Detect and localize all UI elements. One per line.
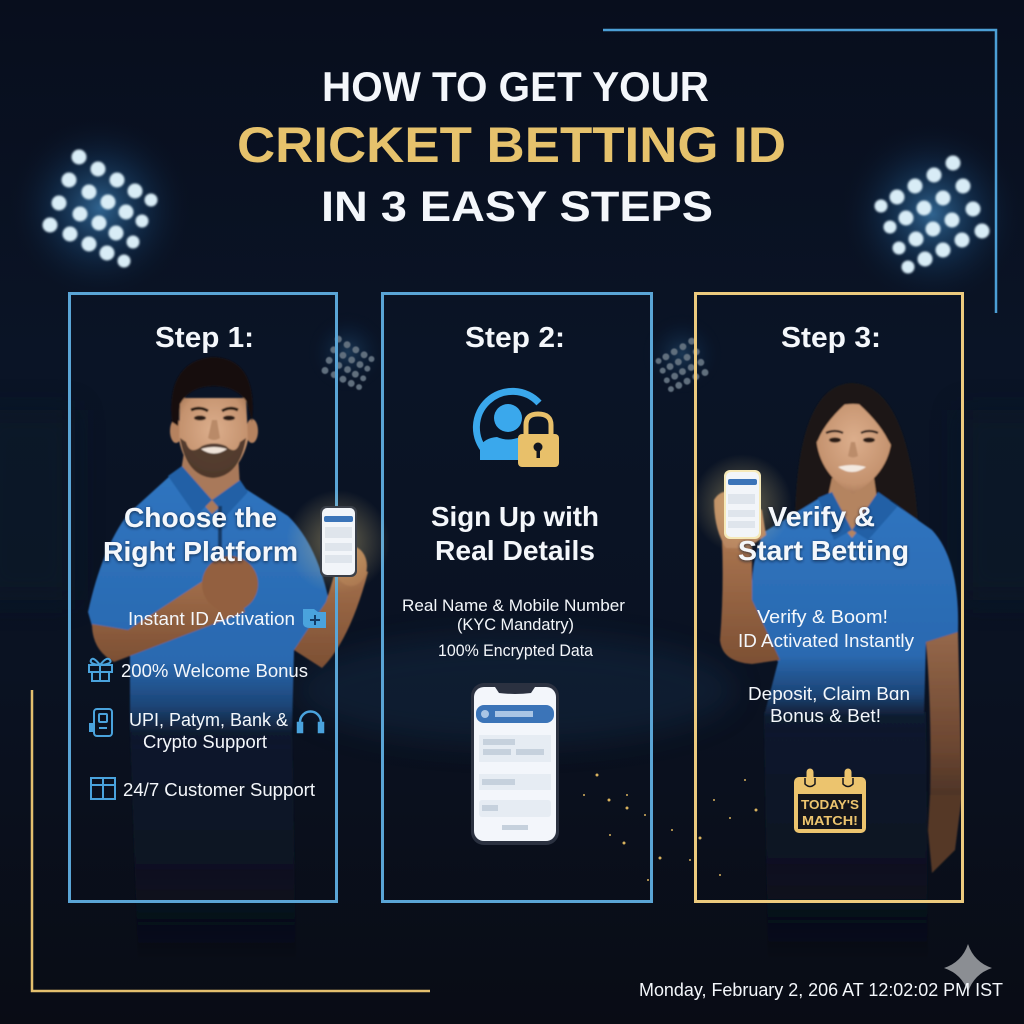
person: woman	[714, 383, 962, 960]
text: KYC details: 100% Encrypted Data	[438, 641, 593, 660]
icon: headphones	[298, 712, 323, 732]
eyes	[194, 416, 206, 420]
title line 2: CRICKET BETTING ID	[237, 117, 786, 173]
left forearm	[92, 562, 245, 662]
panel: step 2	[382, 294, 652, 902]
step 2 heading	[431, 501, 599, 566]
panel: step 3	[696, 294, 962, 902]
gold sparkles	[583, 774, 758, 881]
phone: woman's hand	[692, 454, 792, 554]
face	[179, 398, 248, 478]
neck	[826, 478, 878, 538]
eyes	[829, 437, 841, 443]
fist	[202, 556, 258, 612]
floodlight: small left	[308, 312, 388, 392]
smile	[838, 465, 866, 472]
corner frame: bottom left	[32, 690, 430, 991]
date stamp: Monday, February 2, 206 AT 12:02:02 PM IST	[639, 980, 1003, 1000]
step 2 heading: Sign Up with	[431, 501, 599, 532]
left hand	[714, 492, 766, 548]
shirt	[88, 474, 330, 732]
text: welcome bonus: 200% Welcome Bonus	[121, 661, 308, 681]
icon: folder plus	[303, 609, 326, 628]
step 1 label: Step 1:	[155, 322, 254, 354]
icon: user and padlock	[476, 391, 559, 467]
text: payment support: Crypto Support	[143, 732, 267, 752]
text: customer support: 24/7 Customer Support	[123, 780, 315, 800]
collar	[168, 466, 248, 516]
right arm	[926, 632, 962, 800]
right hand	[335, 546, 367, 586]
step 1 heading	[103, 502, 298, 567]
phone glow	[692, 454, 792, 554]
right forearm	[294, 556, 368, 668]
shirt	[752, 498, 958, 716]
text: verify: ID Activated Instantly	[738, 631, 914, 651]
panel: step 1	[70, 294, 336, 902]
nose	[208, 420, 220, 440]
phone glow	[286, 490, 390, 594]
icon: sparkle watermark	[944, 944, 992, 992]
text: KYC details: Real Name & Mobile Number	[402, 596, 625, 615]
phone mockup	[471, 683, 559, 845]
hair back	[795, 383, 918, 522]
floodlight: left	[8, 116, 192, 300]
step 1 heading: Choose the	[124, 502, 277, 533]
title line 1: HOW TO GET YOUR	[322, 63, 709, 110]
floodlight: right	[840, 122, 1024, 306]
title	[237, 63, 786, 231]
step 3 heading: Verify &	[768, 501, 875, 532]
face	[816, 404, 892, 494]
ears	[170, 419, 182, 443]
stadium silhouette	[0, 410, 1024, 745]
smile	[201, 447, 227, 454]
step 3 label: Step 3:	[781, 322, 881, 354]
trousers	[764, 712, 928, 960]
left arm	[720, 540, 780, 664]
eyebrows	[191, 408, 238, 411]
right hand	[928, 795, 962, 873]
text: payment support	[129, 710, 288, 752]
icon: gift	[89, 659, 112, 681]
person: man	[88, 357, 368, 960]
nose	[848, 442, 858, 458]
text: KYC details: (KYC Mandatry)	[457, 615, 574, 634]
icon: today's match calendar	[794, 772, 866, 833]
text: instant ID activation: Instant ID Activation	[128, 609, 295, 629]
text: deposit	[748, 684, 910, 726]
step 3 heading: Start Betting	[738, 535, 909, 566]
corner frame: top right	[603, 30, 996, 313]
text: payment support: UPI, Patym, Bank &	[129, 710, 288, 730]
floodlight: small right	[642, 314, 722, 394]
phone: man's hand	[286, 490, 390, 594]
icon: mobile payment	[90, 709, 112, 736]
eyebrows	[826, 431, 878, 433]
text: KYC details	[402, 596, 625, 660]
title line 3: IN 3 EASY STEPS	[321, 183, 713, 231]
step 2 heading: Real Details	[435, 535, 595, 566]
beard	[180, 438, 246, 478]
neck	[180, 452, 240, 514]
text: verify: Verify & Boom!	[757, 607, 888, 627]
step 2 label: Step 2:	[465, 322, 565, 354]
collar	[818, 492, 898, 540]
text: verify	[738, 607, 914, 651]
hair	[171, 357, 253, 426]
text: deposit: Deposit, Claim Bɑn	[748, 684, 910, 704]
hair front	[812, 384, 894, 450]
text: deposit: Bonus & Bet!	[770, 706, 881, 726]
step 1 heading: Right Platform	[103, 536, 298, 567]
icon: gift box	[91, 777, 115, 799]
step 3 heading	[738, 501, 909, 566]
icon: today's match calendar: TODAY'S	[801, 797, 859, 812]
trousers	[130, 725, 296, 960]
icon: today's match calendar: MATCH!	[802, 813, 858, 828]
